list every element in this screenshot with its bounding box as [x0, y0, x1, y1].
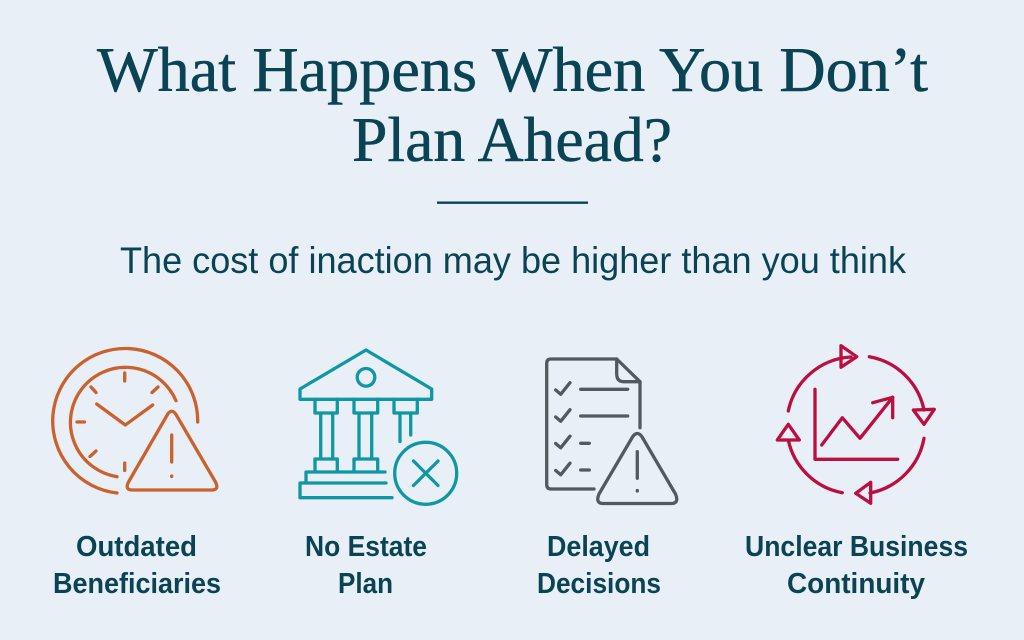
icon: clock with warning triangle	[53, 348, 217, 493]
icon: checklist document with warning triangle	[547, 359, 677, 504]
title: What Happens When You Don’t	[97, 35, 928, 105]
label: no estate plan: No Estate	[305, 531, 427, 563]
title	[97, 35, 928, 175]
subtitle: The cost of inaction may be higher than you think	[120, 240, 906, 281]
label: outdated beneficiaries: Outdated	[76, 531, 197, 563]
label: delayed decisions: Decisions	[537, 568, 661, 600]
label: unclear business continuity: Unclear Business	[745, 531, 968, 563]
label: unclear business continuity: Continuity	[787, 568, 925, 600]
title: Plan Ahead?	[352, 105, 672, 175]
label: outdated beneficiaries: Beneficiaries	[53, 568, 221, 600]
icon: bank with x mark	[300, 350, 457, 504]
icon: chart with cycle arrows	[777, 346, 934, 503]
label: no estate plan: Plan	[338, 568, 393, 600]
label: outdated beneficiaries	[53, 531, 221, 600]
label: unclear business continuity	[745, 531, 968, 600]
label: no estate plan	[305, 531, 427, 600]
label: delayed decisions: Delayed	[547, 531, 650, 563]
label: delayed decisions	[537, 531, 661, 600]
